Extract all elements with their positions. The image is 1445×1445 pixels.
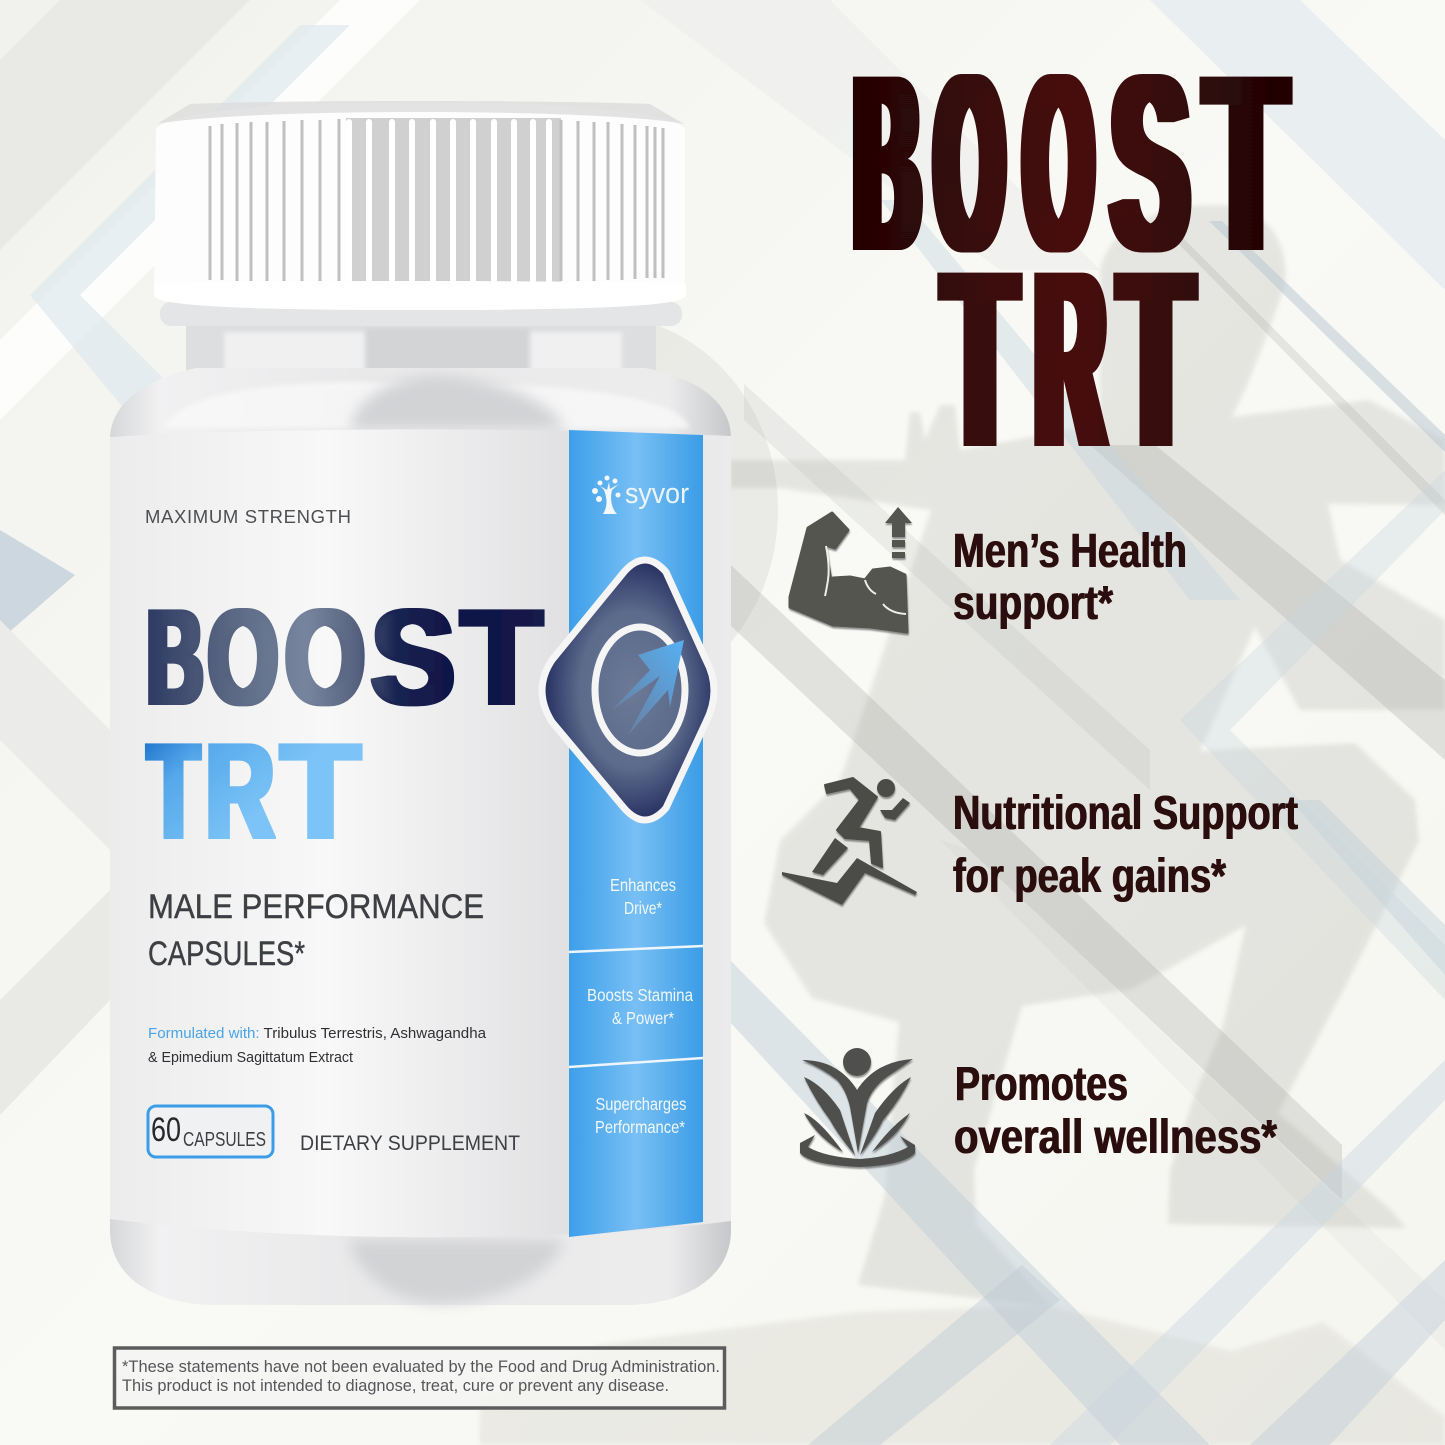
text: overall wellness: Promotes — [955, 1058, 1128, 1111]
text: nutritional support — [953, 787, 1298, 903]
silhouette: squatting man with barbell — [730, 205, 1445, 1306]
logo BOOST: T — [461, 581, 542, 733]
title: O — [936, 23, 1003, 304]
logo BOOST: S — [371, 581, 455, 733]
floor mound — [480, 1306, 1445, 1445]
left background shapes — [0, 0, 1445, 1115]
label — [110, 429, 731, 1237]
logo BOOST: O — [285, 581, 365, 733]
logo TRT — [148, 715, 360, 867]
title: R — [1036, 219, 1104, 500]
label text: & Epimedium Sagittatum Extract — [148, 1049, 354, 1066]
text: men's health: support* — [953, 577, 1113, 630]
benefit labels on bottle — [587, 875, 693, 1137]
benefit labels on bottle: Performance* — [595, 1117, 685, 1137]
text: men's health: Men’s Health — [953, 525, 1187, 578]
icon: running man — [782, 778, 917, 905]
product bottle — [110, 101, 731, 1305]
title: O — [1025, 23, 1092, 304]
logo TRT: T — [148, 715, 199, 867]
title: S — [1112, 23, 1188, 304]
benefit labels on bottle: & Power* — [612, 1008, 674, 1028]
logo BOOST: B — [147, 581, 203, 733]
60 capsules badge: 60 — [151, 1111, 181, 1149]
title: T — [1206, 23, 1286, 304]
bottle body — [110, 368, 731, 1305]
label text: DIETARY SUPPLEMENT — [300, 1132, 520, 1155]
label text: CAPSULES* — [148, 935, 305, 973]
label text: MALE PERFORMANCE — [148, 888, 484, 926]
logo TRT: R — [206, 715, 274, 867]
benefit labels on bottle: Enhances — [610, 875, 676, 895]
title: B — [855, 23, 919, 304]
benefit labels on bottle: Drive* — [624, 898, 662, 918]
logo TRT: T — [281, 715, 360, 867]
icon: wellness figure — [800, 1048, 915, 1167]
text: nutritional support: Nutritional Support — [953, 787, 1298, 840]
label text — [145, 506, 542, 1157]
logo BOOST — [147, 581, 542, 733]
cap ribs — [349, 122, 549, 280]
label text: Formulated with: Tribulus Terrestris, Ashwagandha — [148, 1025, 487, 1042]
text: men's health — [953, 525, 1187, 630]
benefit labels on bottle: Boosts Stamina — [587, 985, 693, 1005]
cap — [154, 101, 686, 310]
60 capsules badge — [148, 1106, 273, 1157]
title: T — [944, 219, 1016, 500]
text: nutritional support: for peak gains* — [953, 850, 1226, 903]
60 capsules badge: CAPSULES — [183, 1129, 266, 1151]
text: overall wellness: overall wellness* — [954, 1111, 1277, 1164]
disclaimer box — [114, 1348, 724, 1408]
disclaimer box: *These statements have not been evaluated by the Food and Drug Administration. — [122, 1358, 720, 1376]
barbell plate — [422, 315, 778, 705]
title — [855, 23, 1286, 500]
icon: flexed arm with up arrow — [790, 507, 912, 632]
label text: MAXIMUM STRENGTH — [145, 506, 351, 527]
title: T — [1120, 219, 1192, 500]
brand logo: syvor — [592, 476, 689, 514]
text: overall wellness — [954, 1058, 1277, 1164]
diamond logo with arrow — [542, 560, 714, 820]
diagonal bands — [730, 200, 1445, 1445]
brand logo: syvor: syvor — [625, 478, 689, 510]
blue side panel — [542, 430, 714, 1237]
logo BOOST: O — [208, 581, 278, 733]
disclaimer box: This product is not intended to diagnose, treat, cure or prevent any disease. — [122, 1377, 669, 1395]
bottle neck — [186, 322, 656, 382]
benefit labels on bottle: Supercharges — [596, 1094, 687, 1114]
